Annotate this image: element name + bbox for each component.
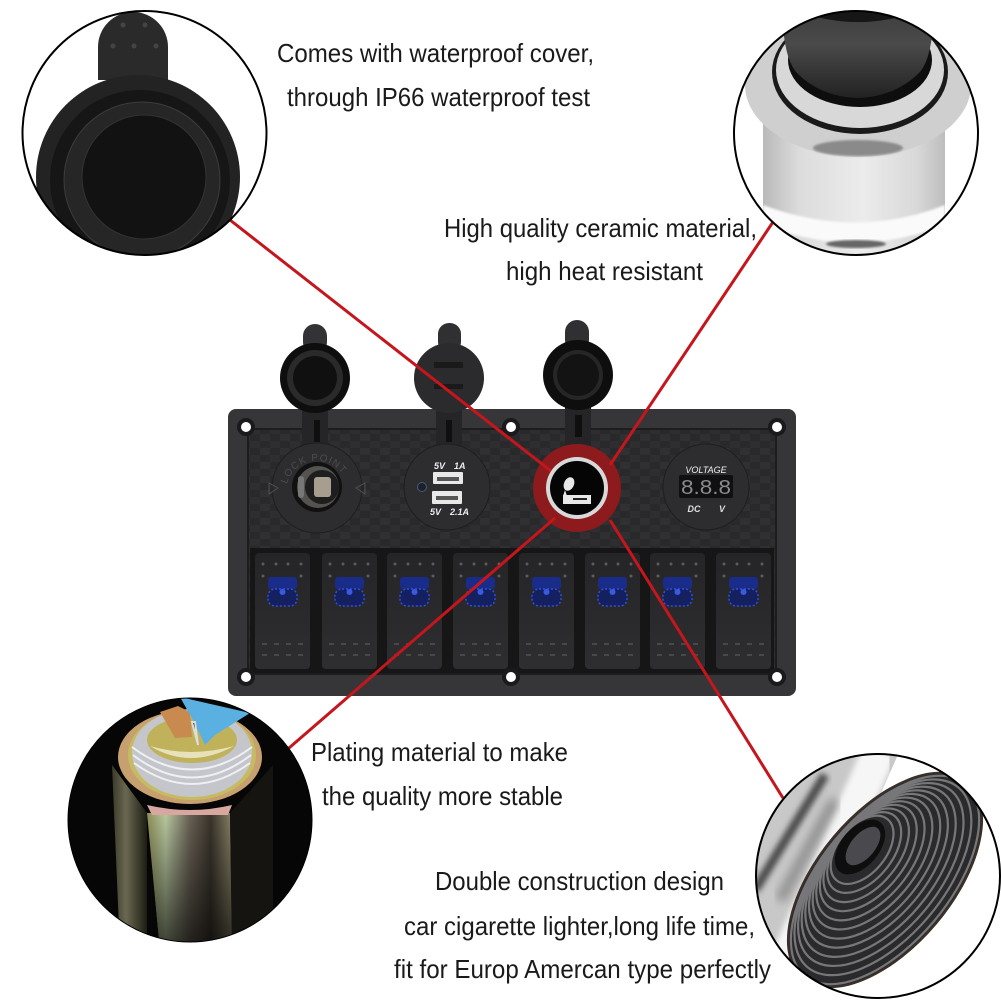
- rocker switches: [255, 553, 771, 669]
- rocker bay: [250, 548, 774, 673]
- voltmeter: V: [719, 504, 726, 514]
- detail circle: ceramic lighter plug: [734, 0, 978, 265]
- voltmeter: 8.8.8: [681, 477, 731, 499]
- USB charger socket: 5V: [434, 461, 446, 471]
- caption: plating material: Plating material to make: [311, 737, 568, 767]
- carbon fibre inset: [248, 429, 776, 674]
- caption: waterproof cover: through IP66 waterproof test: [287, 82, 591, 112]
- detail circle: double construction rings: [750, 739, 1001, 1001]
- USB charger socket: 1A: [454, 461, 466, 471]
- caption: double construction: fit for Europ Amercan type perfectly: [394, 954, 771, 984]
- voltmeter: [663, 444, 749, 530]
- caption: double construction: Double construction design: [435, 866, 724, 896]
- lock point socket: [268, 444, 366, 534]
- waterproof cap 3: [543, 320, 613, 450]
- USB charger socket: 5V: [430, 507, 442, 517]
- caption: waterproof cover: [277, 38, 594, 112]
- USB charger socket: [404, 444, 490, 530]
- leader lines: [230, 220, 783, 798]
- waterproof cap 1: [280, 324, 350, 450]
- lock point socket: LOCK POINT: [280, 454, 347, 484]
- caption: double construction: [394, 866, 771, 984]
- caption: plating material: [311, 737, 568, 811]
- cigarette lighter socket: [533, 444, 621, 532]
- detail circle: waterproof cover: [22, 11, 266, 279]
- caption: double construction: car cigarette lighter,long life time,: [404, 911, 755, 941]
- voltmeter: DC: [688, 504, 701, 514]
- waterproof cap 2: [414, 323, 484, 450]
- caption: ceramic material: [444, 213, 757, 286]
- caption: plating material: the quality more stable: [322, 781, 563, 811]
- caption: ceramic material: High quality ceramic material,: [444, 213, 757, 243]
- caption: ceramic material: high heat resistant: [506, 256, 704, 286]
- caption: waterproof cover: Comes with waterproof cover,: [277, 38, 594, 68]
- screw holes: [237, 418, 786, 686]
- USB charger socket: 2.1A: [449, 507, 469, 517]
- voltmeter: VOLTAGE: [685, 465, 728, 475]
- detail circle: plated body: [68, 697, 312, 950]
- switch panel: [228, 320, 796, 696]
- panel frame: [228, 409, 796, 696]
